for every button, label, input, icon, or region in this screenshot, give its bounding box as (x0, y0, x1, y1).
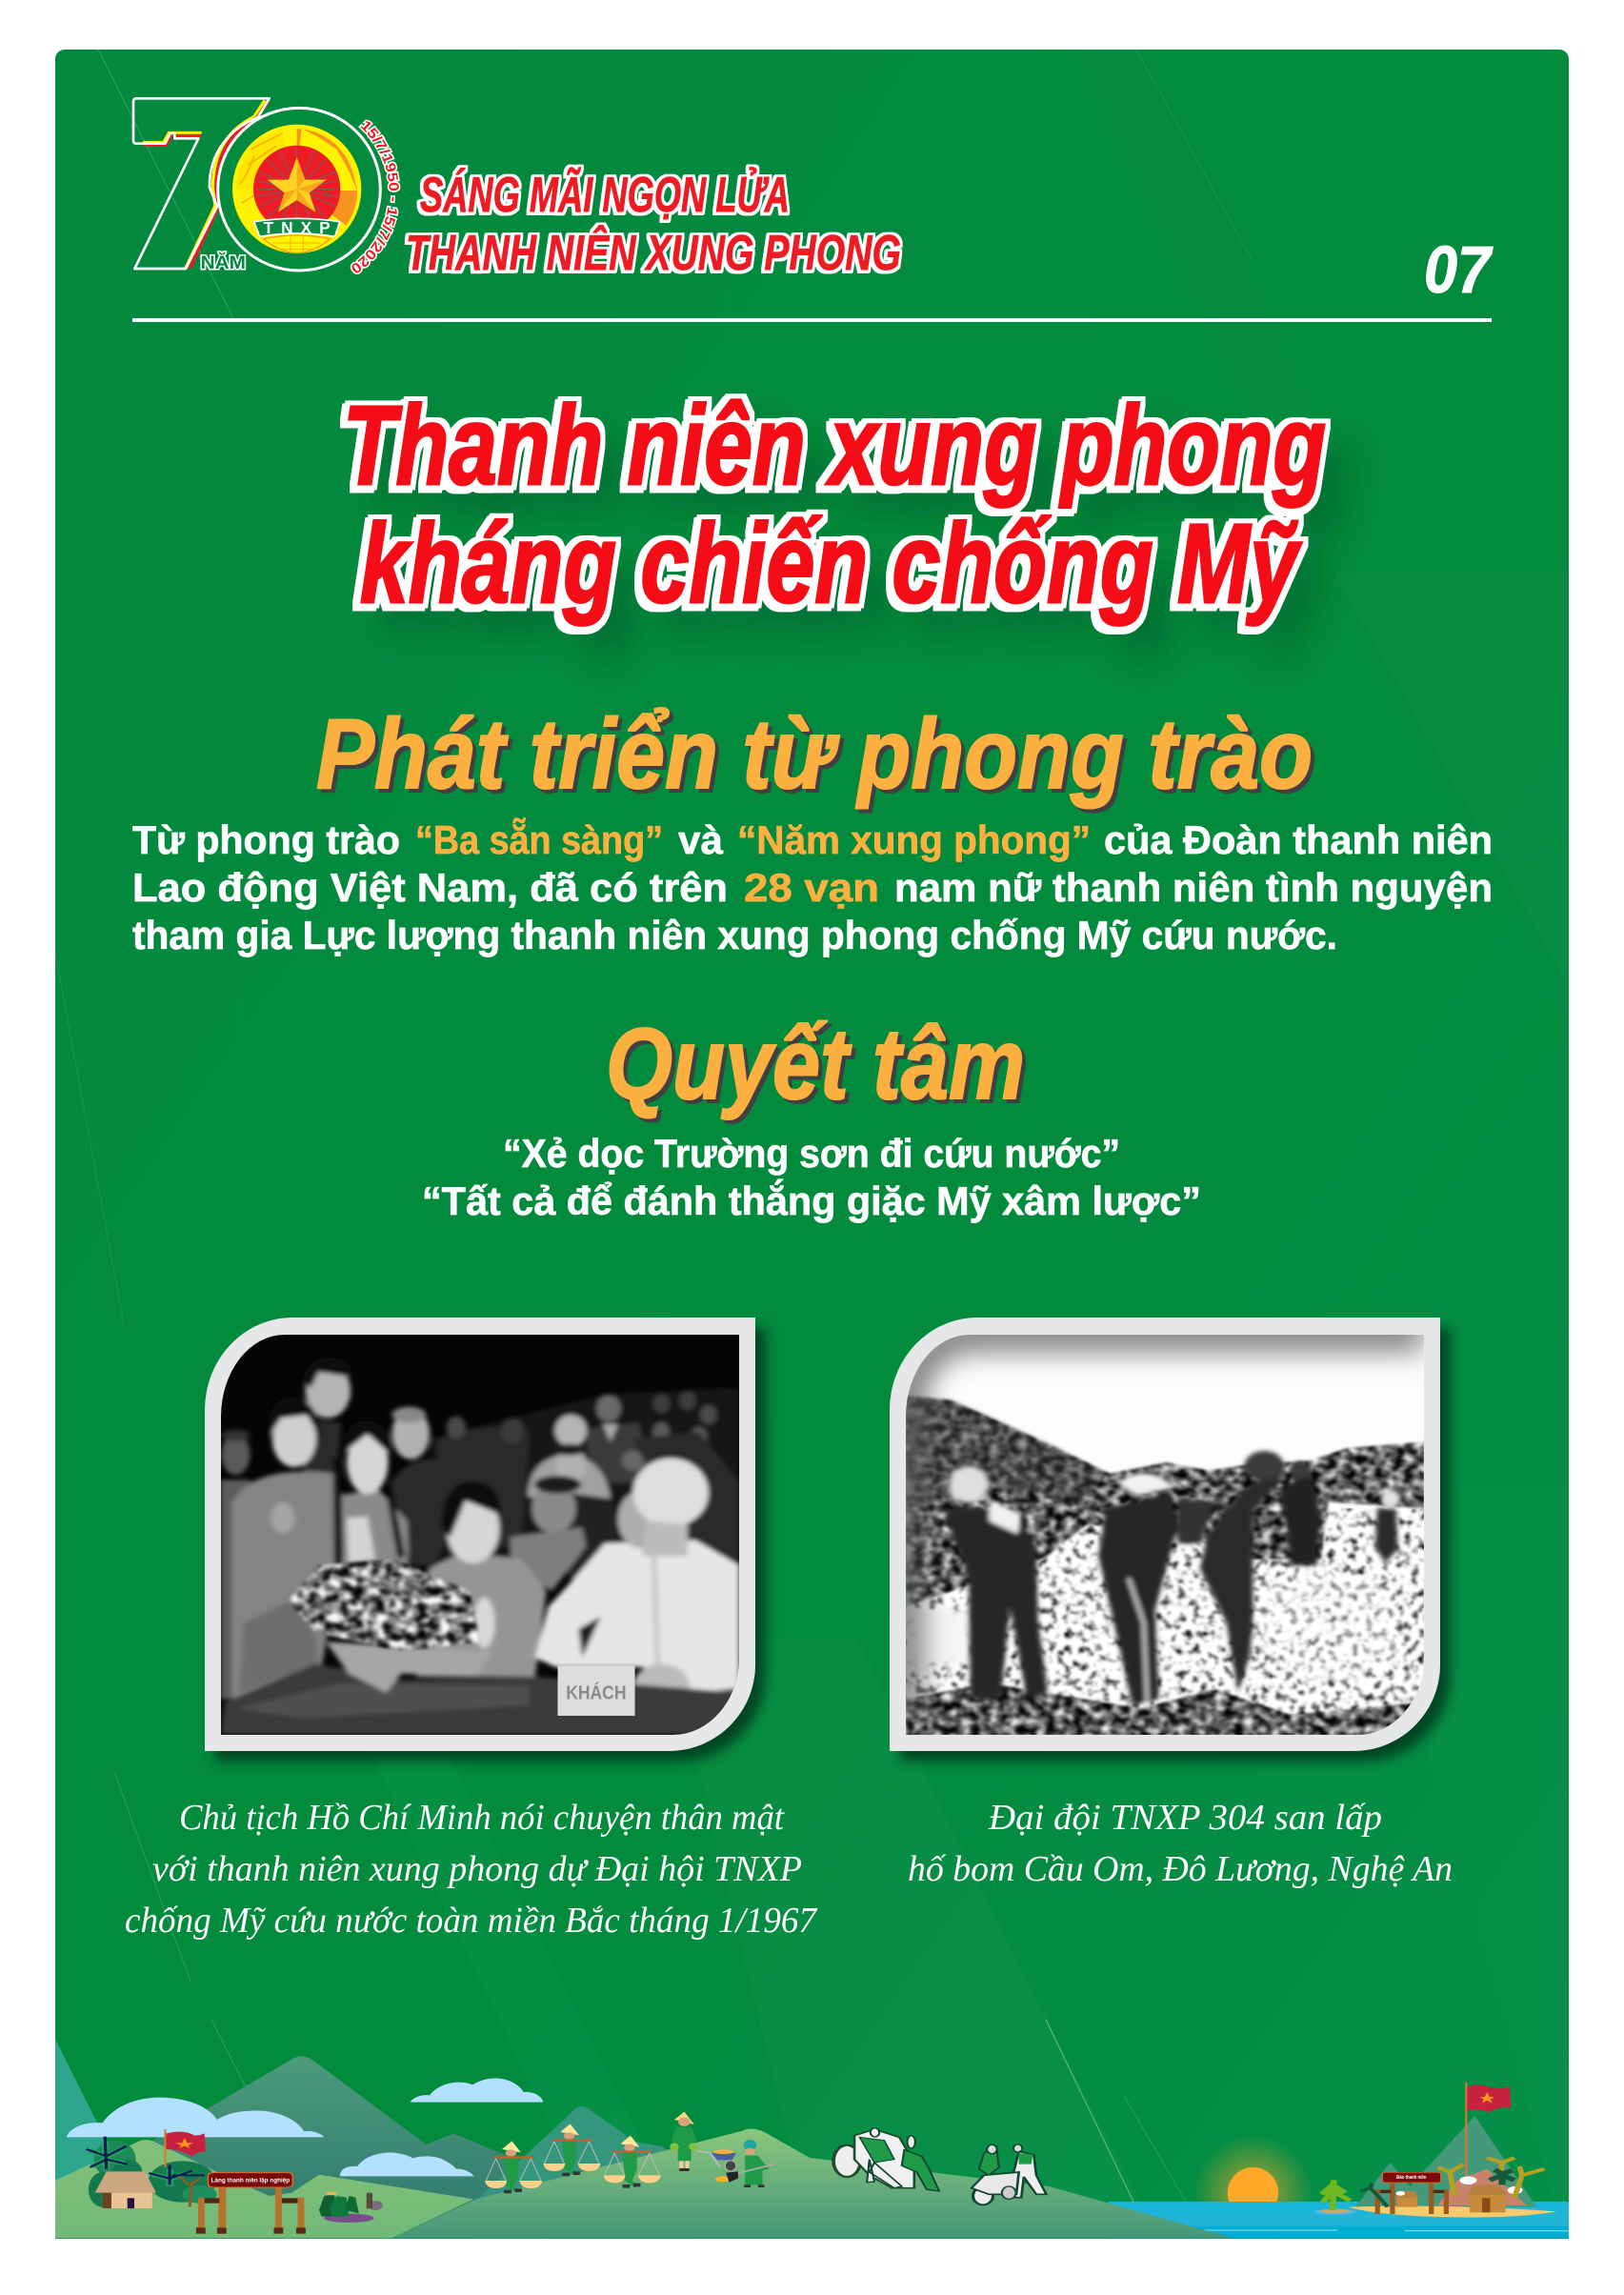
mountains (55, 2039, 695, 2238)
icon: youth pushing bicycles (833, 2128, 1046, 2204)
hills (55, 2129, 1233, 2238)
header logo: 70 years emblem (131, 97, 400, 274)
label: năm: NĂM (201, 252, 246, 273)
icon: worker with wheelbarrow (696, 2140, 774, 2187)
icon: Vietnam flag right (1465, 2083, 1511, 2176)
heading: Quyết tâm: Quyết tâm (606, 1008, 1025, 1120)
photo: President Ho Chi Minh with youth (221, 1335, 740, 1735)
icon: village gate: Làng thanh niên lập nghiệp (211, 2177, 290, 2184)
caption: right photo (908, 1798, 1453, 1889)
icon: Vietnam flag left (164, 2129, 206, 2167)
label: guest sign (558, 1665, 635, 1716)
label: guest sign: KHÁCH (566, 1681, 626, 1703)
icon: carriers with shoulder poles (485, 2124, 661, 2193)
heading: Phát triển từ phong trào: Phát triển từ phong trào (316, 699, 1313, 810)
caption: right photo: hố bom Cầu Om, Đô Lương, Nghệ An (908, 1849, 1453, 1889)
text block: movement paragraph: và (678, 817, 724, 862)
icon: sun (1196, 2138, 1311, 2239)
panel: right photo frame (890, 1318, 1440, 1751)
page number: 07 (1424, 232, 1494, 307)
photo: Company 304 filling bomb craters (899, 1335, 1426, 1737)
caption: left photo (125, 1798, 818, 1941)
icon: TNXP emblem (232, 125, 361, 253)
text block: movement paragraph: Lao động Việt Nam, đã có trên (132, 865, 728, 910)
icon: island scene: Đảo thanh niên (1396, 2175, 1426, 2181)
illustration: landscape footer (55, 2039, 1572, 2250)
header slogan (406, 167, 901, 281)
text block: movement paragraph: “Năm xung phong” (737, 817, 1091, 862)
icon: number seven (133, 98, 270, 269)
caption: left photo: với thanh niên xung phong dự Đại hội TNXP (152, 1849, 802, 1889)
caption: right photo: Đại đội TNXP 304 san lấp (988, 1798, 1382, 1838)
text block: slogans: “Xẻ dọc Trường sơn đi cứu nước” (503, 1131, 1120, 1176)
main title: kháng chiến chống Mỹ (360, 501, 1302, 627)
caption: left photo: chống Mỹ cứu nước toàn miền Bắc tháng 1/1967 (125, 1901, 818, 1941)
text block: slogans: “Tất cả để đánh thắng giặc Mỹ xâm lược” (422, 1178, 1201, 1223)
text block: movement paragraph: nam nữ thanh niên tình nguyện (894, 865, 1493, 910)
icon: date arc text (344, 127, 390, 271)
icon: group of youth (319, 2191, 383, 2223)
header slogan: SÁNG MÃI NGỌN LỬA (420, 167, 790, 223)
text block: movement paragraph: “Ba sẵn sàng” (415, 816, 663, 862)
icon: palm bush and house (87, 2137, 217, 2208)
text block: movement paragraph (132, 816, 1493, 957)
text block: slogans (422, 1131, 1201, 1223)
sea (1109, 2202, 1572, 2238)
panel: left photo frame (205, 1318, 755, 1751)
header slogan: THANH NIÊN XUNG PHONG (406, 225, 901, 281)
header logo: 70 years emblem: 15/7/1950 - 15/7/2020 (351, 119, 400, 274)
main title (343, 383, 1326, 627)
text block: movement paragraph: của Đoàn thanh niên (1104, 817, 1493, 862)
icon: white ring (218, 108, 380, 271)
flower bouquet (289, 1560, 480, 1651)
text block: movement paragraph: Từ phong trào (132, 817, 400, 862)
icon: TNXP emblem: TNXP (264, 218, 331, 237)
icon: woman with conical hat (670, 2112, 698, 2171)
main title: Thanh niên xung phong (343, 383, 1326, 509)
icon: island scene (1314, 2116, 1557, 2217)
text block: movement paragraph: 28 vạn (744, 865, 879, 910)
clouds (67, 2079, 543, 2176)
caption: left photo: Chủ tịch Hồ Chí Minh nói chuyện thân mật (179, 1798, 785, 1838)
icon: village gate (196, 2173, 306, 2234)
text block: movement paragraph: tham gia Lực lượng thanh niên xung phong chống Mỹ cứu nước. (132, 913, 1337, 957)
